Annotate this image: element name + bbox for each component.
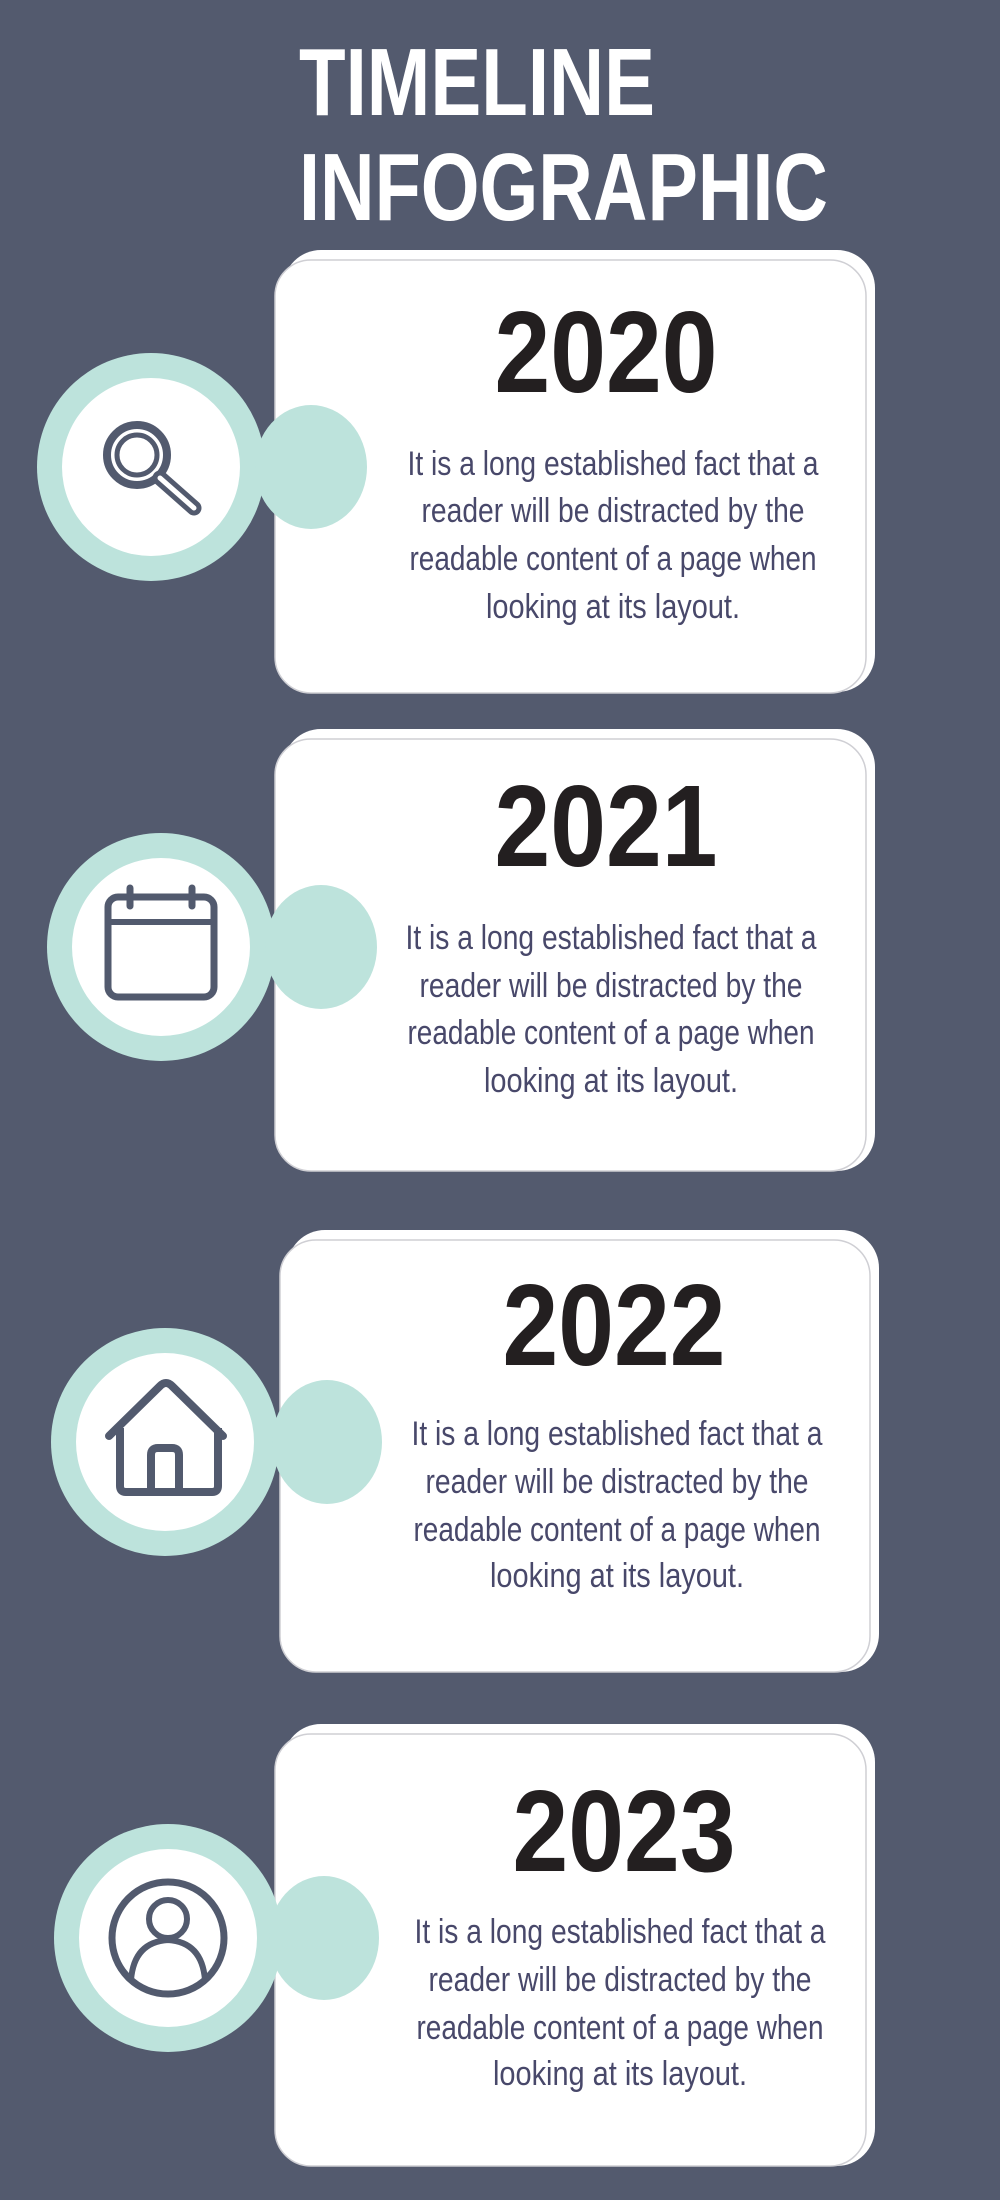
text block 2023: It is a long established fact that a <box>414 1913 826 1951</box>
title <box>299 29 828 241</box>
text block 2023: readable content of a page when <box>416 2009 824 2047</box>
text block 2021: It is a long established fact that a <box>406 919 817 957</box>
year 2022: 2022 <box>502 1260 726 1390</box>
text block 2022: It is a long established fact that a <box>412 1415 823 1453</box>
panel: 2022 <box>280 1230 879 1672</box>
icon: house badge <box>51 1328 382 1556</box>
text block 2020: readable content of a page when <box>410 540 816 578</box>
text block 2022: reader will be distracted by the <box>426 1463 808 1501</box>
text block 2022: looking at its layout. <box>490 1557 744 1595</box>
panel: 2020 <box>275 250 875 693</box>
title: INFOGRAPHIC <box>299 134 828 241</box>
year 2021: 2021 <box>494 761 718 891</box>
text block 2020 <box>408 445 819 626</box>
text block 2021 <box>406 919 817 1100</box>
text block 2020: reader will be distracted by the <box>422 492 804 530</box>
text block 2023: looking at its layout. <box>493 2055 747 2093</box>
text block 2023 <box>414 1913 826 2093</box>
text block 2023: reader will be distracted by the <box>428 1961 812 1999</box>
text block 2021: reader will be distracted by the <box>420 967 802 1005</box>
icon: person badge <box>54 1824 379 2052</box>
year 2023: 2023 <box>512 1766 736 1896</box>
year 2020: 2020 <box>494 287 718 417</box>
icon: magnifier badge <box>37 353 367 581</box>
text block 2022 <box>412 1415 823 1595</box>
text block 2021: readable content of a page when <box>408 1014 814 1052</box>
panel: 2023 <box>275 1724 875 2166</box>
panel: 2021 <box>275 729 875 1171</box>
text block 2020: It is a long established fact that a <box>408 445 819 483</box>
text block 2020: looking at its layout. <box>486 588 740 626</box>
title: TIMELINE <box>299 29 655 136</box>
text block 2021: looking at its layout. <box>484 1062 738 1100</box>
icon: calendar badge <box>47 833 377 1061</box>
text block 2022: readable content of a page when <box>414 1511 820 1549</box>
